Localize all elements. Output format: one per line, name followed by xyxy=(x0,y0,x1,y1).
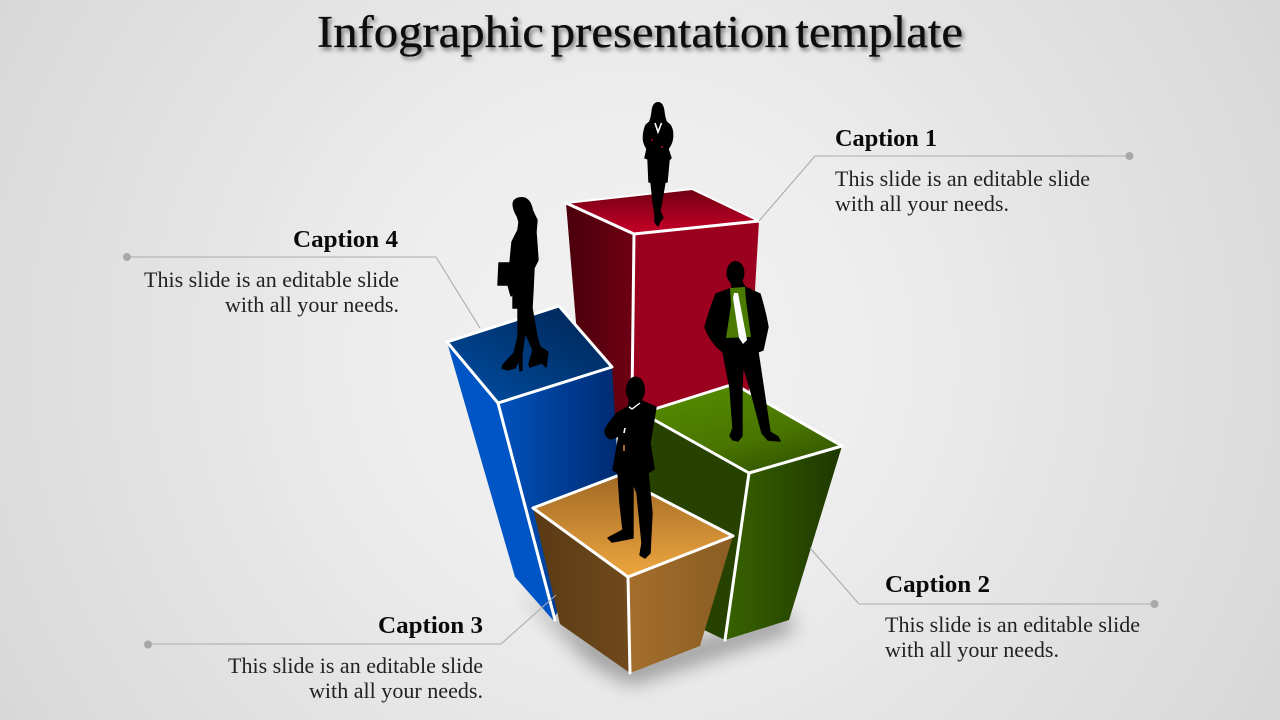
caption 1 heading: Caption 1 xyxy=(835,126,937,152)
red box front face xyxy=(632,221,759,430)
caption 3 leader line xyxy=(144,595,556,648)
caption 4 heading: Caption 4 xyxy=(293,227,398,253)
shirt xyxy=(726,287,751,338)
caption 3 body: with all your needs. xyxy=(309,678,483,703)
caption 4 body: with all your needs. xyxy=(225,292,399,317)
caption 3 body: This slide is an editable slide xyxy=(228,653,483,678)
orange box top face xyxy=(533,476,733,577)
blue box left face xyxy=(447,342,553,620)
orange box left face xyxy=(533,508,630,673)
orange box xyxy=(533,476,733,673)
caption 1 leader line xyxy=(759,152,1134,221)
green box front face xyxy=(725,446,842,640)
blue box xyxy=(447,306,620,620)
red box top face xyxy=(566,189,759,234)
blue box front face xyxy=(498,367,620,620)
silhouette: man on orange box xyxy=(605,376,656,558)
silhouette: man on green box xyxy=(705,261,780,441)
blue box top face xyxy=(447,306,612,403)
caption 4 body: This slide is an editable slide xyxy=(144,267,399,292)
caption 2 body: This slide is an editable slide xyxy=(885,612,1140,637)
caption 2 body: with all your needs. xyxy=(885,637,1059,662)
silhouette: woman with folder on blue box xyxy=(498,197,548,371)
caption 2 xyxy=(810,548,1158,662)
red box xyxy=(566,189,759,430)
green box top face xyxy=(642,384,842,473)
caption 3 heading: Caption 3 xyxy=(378,613,483,639)
orange box front face xyxy=(628,536,733,673)
tie xyxy=(733,293,747,344)
caption 1 body: with all your needs. xyxy=(835,191,1009,216)
caption 3 xyxy=(144,595,556,703)
ground shadow xyxy=(522,590,795,684)
red box left face xyxy=(566,203,634,430)
caption 1 xyxy=(759,126,1134,221)
silhouette: woman on red box xyxy=(643,102,673,226)
green box left face xyxy=(620,413,749,640)
caption 2 leader line xyxy=(810,548,1158,608)
green box xyxy=(620,384,842,640)
caption 4 leader line xyxy=(123,253,480,328)
caption 1 body: This slide is an editable slide xyxy=(835,166,1090,191)
title: Infographic presentation template xyxy=(317,7,963,57)
caption 2 heading: Caption 2 xyxy=(885,572,990,598)
caption 4 xyxy=(123,227,480,328)
